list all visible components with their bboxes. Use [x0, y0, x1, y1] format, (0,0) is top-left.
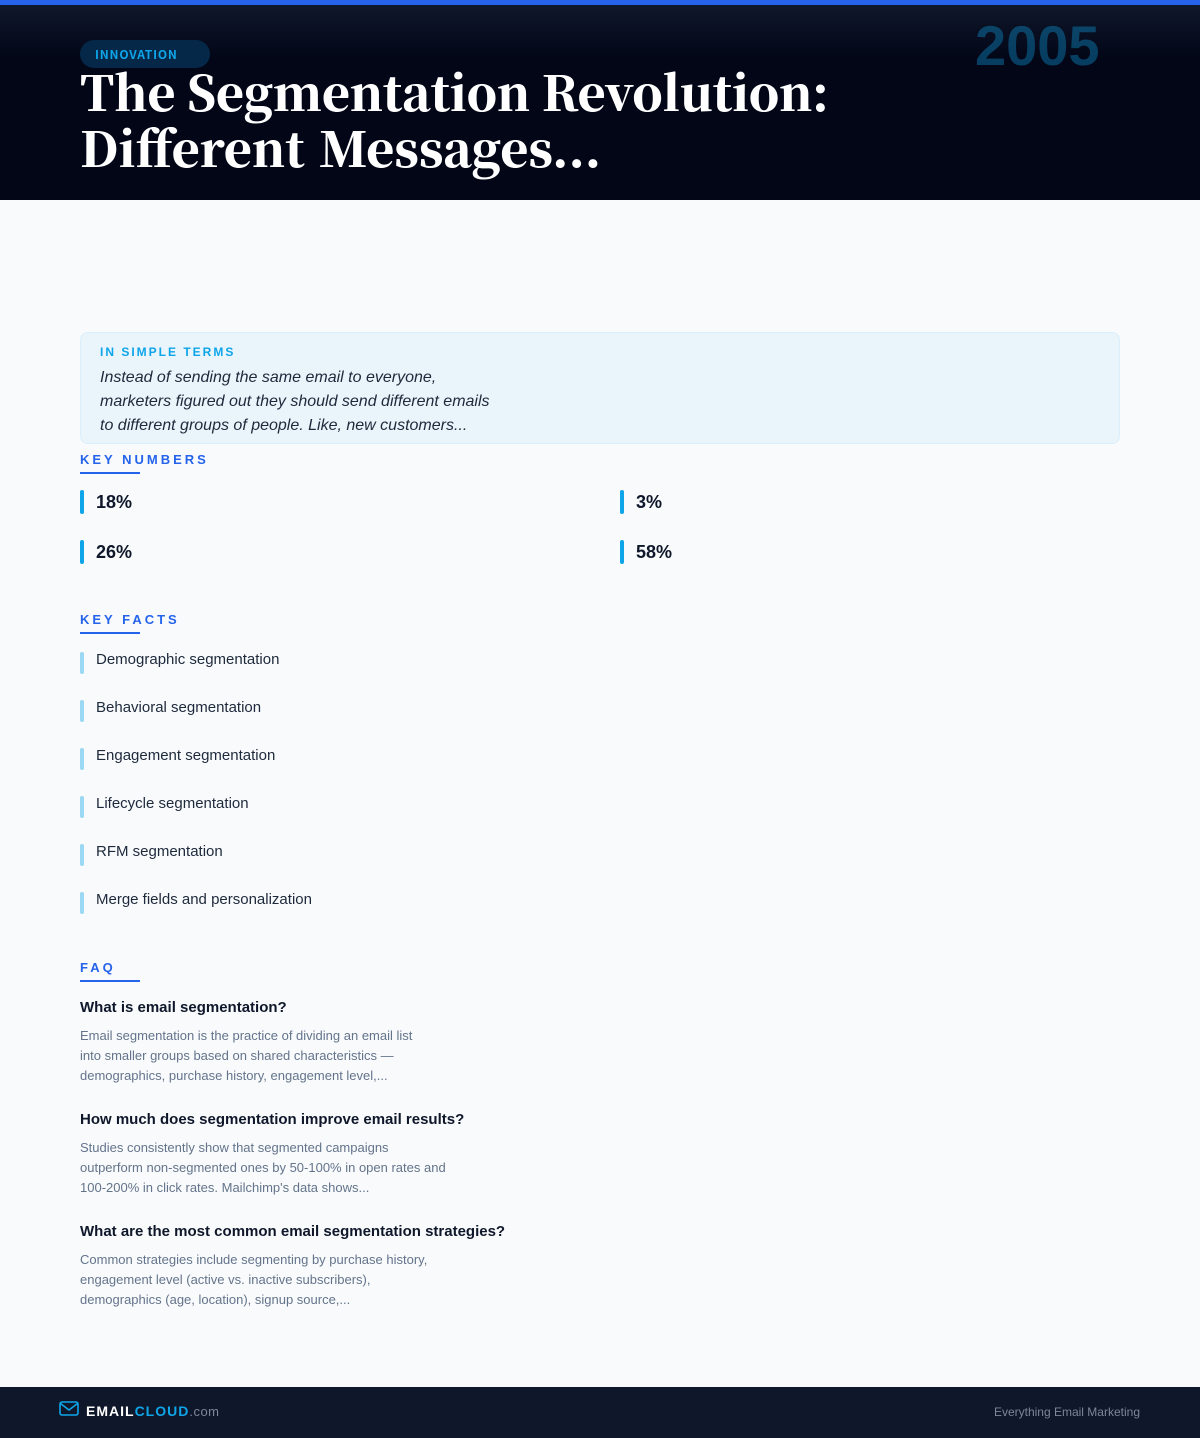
stat: 26%: 26%	[96, 542, 132, 562]
title: The Segmentation Revolution:	[80, 56, 828, 125]
fact list: Merge fields and personalization	[96, 891, 312, 908]
panel text	[100, 369, 490, 434]
faq item 1: Email segmentation is the practice of dividing an email list	[80, 1028, 412, 1043]
faq item 1	[80, 999, 412, 1083]
stat: 18%	[80, 490, 132, 514]
stat: 58%	[620, 540, 672, 564]
panel: in simple terms	[80, 332, 1120, 444]
heading: key numbers: KEY NUMBERS	[80, 452, 209, 467]
faq item 3: What are the most common email segmentation strategies?	[80, 1223, 505, 1240]
footer tagline: Everything Email Marketing	[994, 1405, 1140, 1419]
title	[80, 56, 828, 181]
year watermark: 2005	[975, 14, 1100, 77]
stat: 3%: 3%	[636, 492, 662, 512]
fact list: Engagement segmentation	[96, 747, 275, 764]
stat: 26%	[80, 540, 132, 564]
faq item 1: demographics, purchase history, engagement level,...	[80, 1068, 388, 1083]
badge label: INNOVATION	[95, 46, 178, 63]
footer	[0, 1387, 1200, 1438]
faq item 3: Common strategies include segmenting by purchase history,	[80, 1252, 427, 1267]
stat: 58%: 58%	[636, 542, 672, 562]
top accent bar	[0, 0, 1200, 5]
fact list: Behavioral segmentation	[96, 699, 261, 716]
faq item 1: What is email segmentation?	[80, 999, 287, 1016]
panel text: Instead of sending the same email to everyone,	[100, 369, 436, 386]
panel label: IN SIMPLE TERMS	[100, 345, 235, 359]
fact list: RFM segmentation	[96, 843, 223, 860]
logo wordmark: EMAILCLOUD.com	[86, 1403, 220, 1419]
header band	[0, 0, 1200, 200]
stat: 3%	[620, 490, 662, 514]
heading: key facts: KEY FACTS	[80, 612, 180, 627]
fact list: Demographic segmentation	[96, 651, 279, 668]
panel text: marketers figured out they should send different emails	[100, 393, 490, 410]
title: Different Messages...	[80, 112, 601, 181]
category badge	[80, 40, 210, 68]
faq item 2: Studies consistently show that segmented campaigns	[80, 1140, 389, 1155]
faq item 1: into smaller groups based on shared characteristics —	[80, 1048, 394, 1063]
stat: 18%: 18%	[96, 492, 132, 512]
faq item 3	[80, 1223, 505, 1307]
fact list	[80, 651, 312, 914]
faq item 2: outperform non-segmented ones by 50-100% in open rates and	[80, 1160, 446, 1175]
faq item 2: How much does segmentation improve email results?	[80, 1111, 464, 1128]
faq item 3: demographics (age, location), signup source,...	[80, 1292, 350, 1307]
heading: faq: FAQ	[80, 960, 116, 975]
icon: envelope	[59, 1401, 79, 1416]
faq item 2	[80, 1111, 464, 1195]
panel text: to different groups of people. Like, new customers...	[100, 417, 467, 434]
fact list: Lifecycle segmentation	[96, 795, 249, 812]
faq item 2: 100-200% in click rates. Mailchimp's data shows...	[80, 1180, 369, 1195]
faq item 3: engagement level (active vs. inactive subscribers),	[80, 1272, 370, 1287]
